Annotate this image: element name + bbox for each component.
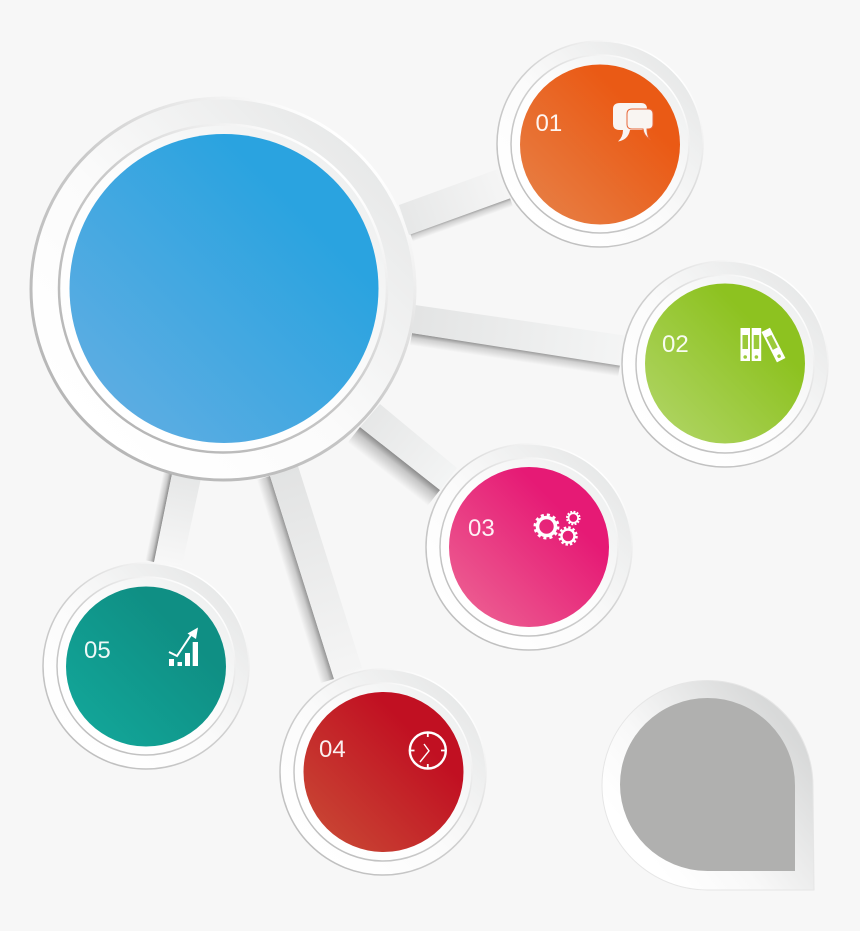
icon: speech bubbles [613,103,653,142]
node 01 [497,41,703,247]
number 02: 02 [662,331,689,358]
node 03 [426,444,632,650]
main hub circle [31,98,415,480]
number 03: 03 [468,515,495,542]
icon: growth chart [169,628,198,666]
number 01: 01 [536,110,562,137]
number 04: 04 [319,736,346,763]
node 05 [43,563,249,769]
teardrop placeholder [602,680,814,890]
icon: gears [535,512,580,544]
icon: binders [740,328,785,362]
connector: hub to 02 [410,305,628,377]
node 02 [622,261,828,467]
connector: hub to 04 [257,466,362,683]
number 05: 05 [84,637,111,664]
icon: clock [410,732,446,768]
connector: hub to 05 [145,472,201,566]
node 04 [280,669,486,875]
connector: hub to 01 [399,169,513,242]
connector: hub to 03 [348,404,457,506]
